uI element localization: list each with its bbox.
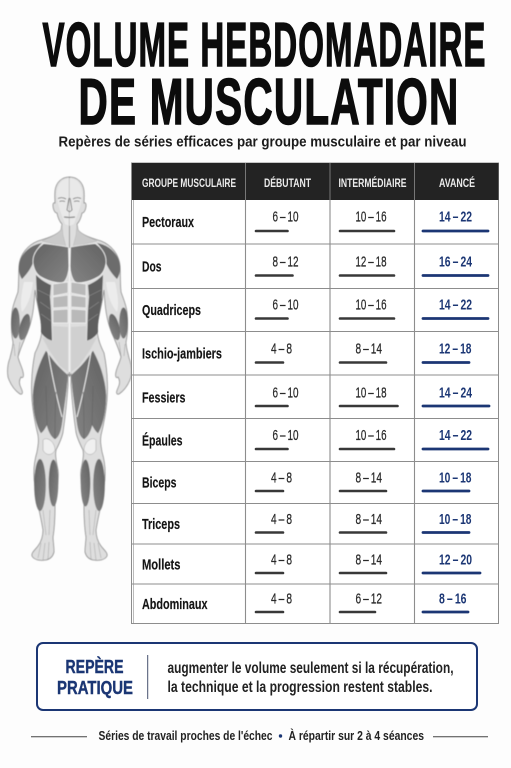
callout heading: PRATIQUE <box>57 677 133 698</box>
row: Ischio-jambiers <box>142 342 472 362</box>
row: Fessiers: 10 – 18 <box>356 386 386 402</box>
row: Ischio-jambiers: 4 – 8 <box>271 342 292 358</box>
icon: anatomical body figure <box>8 177 131 560</box>
row: Biceps <box>142 470 472 492</box>
row: Biceps: Biceps <box>142 474 176 492</box>
row: Quadriceps: 10 – 16 <box>356 298 386 314</box>
callout heading: REPÈRE <box>66 656 124 677</box>
row: Épaules: Épaules <box>142 432 182 450</box>
callout text: la technique et la progression restent stables. <box>168 679 432 696</box>
row: Abdominaux <box>142 592 468 613</box>
table <box>132 163 498 624</box>
row: Mollets: 4 – 8 <box>271 552 292 568</box>
row: Pectoraux: Pectoraux <box>142 214 194 231</box>
callout heading <box>57 656 133 698</box>
row: Biceps: 4 – 8 <box>271 470 292 486</box>
table header: GROUPE MUSCULAIRE <box>142 178 236 190</box>
row: Dos <box>142 254 488 276</box>
row: Dos: 12 – 18 <box>356 254 386 270</box>
row: Épaules: 6 – 10 <box>272 428 298 444</box>
row: Biceps: 10 – 18 <box>439 470 472 486</box>
row: Fessiers: Fessiers <box>142 390 186 406</box>
callout: repère pratique <box>37 643 477 710</box>
row: Ischio-jambiers: 8 – 14 <box>356 342 382 358</box>
row: Mollets: 12 – 20 <box>439 552 472 568</box>
row: Quadriceps <box>142 298 488 319</box>
title <box>42 11 486 138</box>
row: Dos: 8 – 12 <box>272 254 298 270</box>
row: Triceps: 8 – 14 <box>356 512 382 528</box>
row: Pectoraux <box>142 210 488 231</box>
row: Dos: Dos <box>142 258 162 276</box>
row: Triceps <box>142 512 472 533</box>
row: Fessiers: 14 – 24 <box>439 386 472 402</box>
footer note <box>31 728 488 743</box>
row: Mollets <box>142 552 480 574</box>
footer note: Séries de travail proches de l'échec <box>98 728 272 743</box>
footer note: À répartir sur 2 à 4 séances <box>288 728 424 743</box>
row: Quadriceps: 6 – 10 <box>272 298 298 314</box>
row: Triceps: 10 – 18 <box>439 512 472 528</box>
row: Mollets: Mollets <box>142 556 180 574</box>
table header: DÉBUTANT <box>264 177 311 190</box>
table header: INTERMÉDIAIRE <box>338 177 407 190</box>
row: Abdominaux: 6 – 12 <box>356 592 382 608</box>
row: Épaules: 10 – 16 <box>356 428 386 444</box>
row: Abdominaux: 4 – 8 <box>271 592 292 608</box>
table header: AVANCÉ <box>439 177 475 190</box>
row: Biceps: 8 – 14 <box>356 470 382 486</box>
row: Triceps: 4 – 8 <box>271 512 292 528</box>
row: Dos: 16 – 24 <box>439 254 472 270</box>
row: Épaules: 14 – 22 <box>439 428 472 444</box>
row: Fessiers: 6 – 10 <box>272 386 298 402</box>
row: Quadriceps: Quadriceps <box>142 302 201 319</box>
row: Ischio-jambiers: 12 – 18 <box>439 342 472 358</box>
row: Pectoraux: 10 – 16 <box>356 210 386 226</box>
row: Quadriceps: 14 – 22 <box>439 298 472 314</box>
row: Abdominaux: 8 – 16 <box>439 592 466 608</box>
row: Fessiers <box>142 386 489 406</box>
row: Abdominaux: Abdominaux <box>142 596 208 613</box>
row: Pectoraux: 14 – 22 <box>439 210 472 226</box>
row: Épaules <box>142 428 488 450</box>
row: Mollets: 8 – 14 <box>356 552 382 568</box>
row: Ischio-jambiers: Ischio-jambiers <box>142 346 222 362</box>
table header <box>132 163 498 200</box>
row: Pectoraux: 6 – 10 <box>272 210 298 226</box>
callout text <box>168 660 454 696</box>
subtitle: Repères de séries efficaces par groupe musculaire et par niveau <box>58 134 466 150</box>
row: Triceps: Triceps <box>142 516 180 533</box>
table frame and grid <box>132 163 498 624</box>
